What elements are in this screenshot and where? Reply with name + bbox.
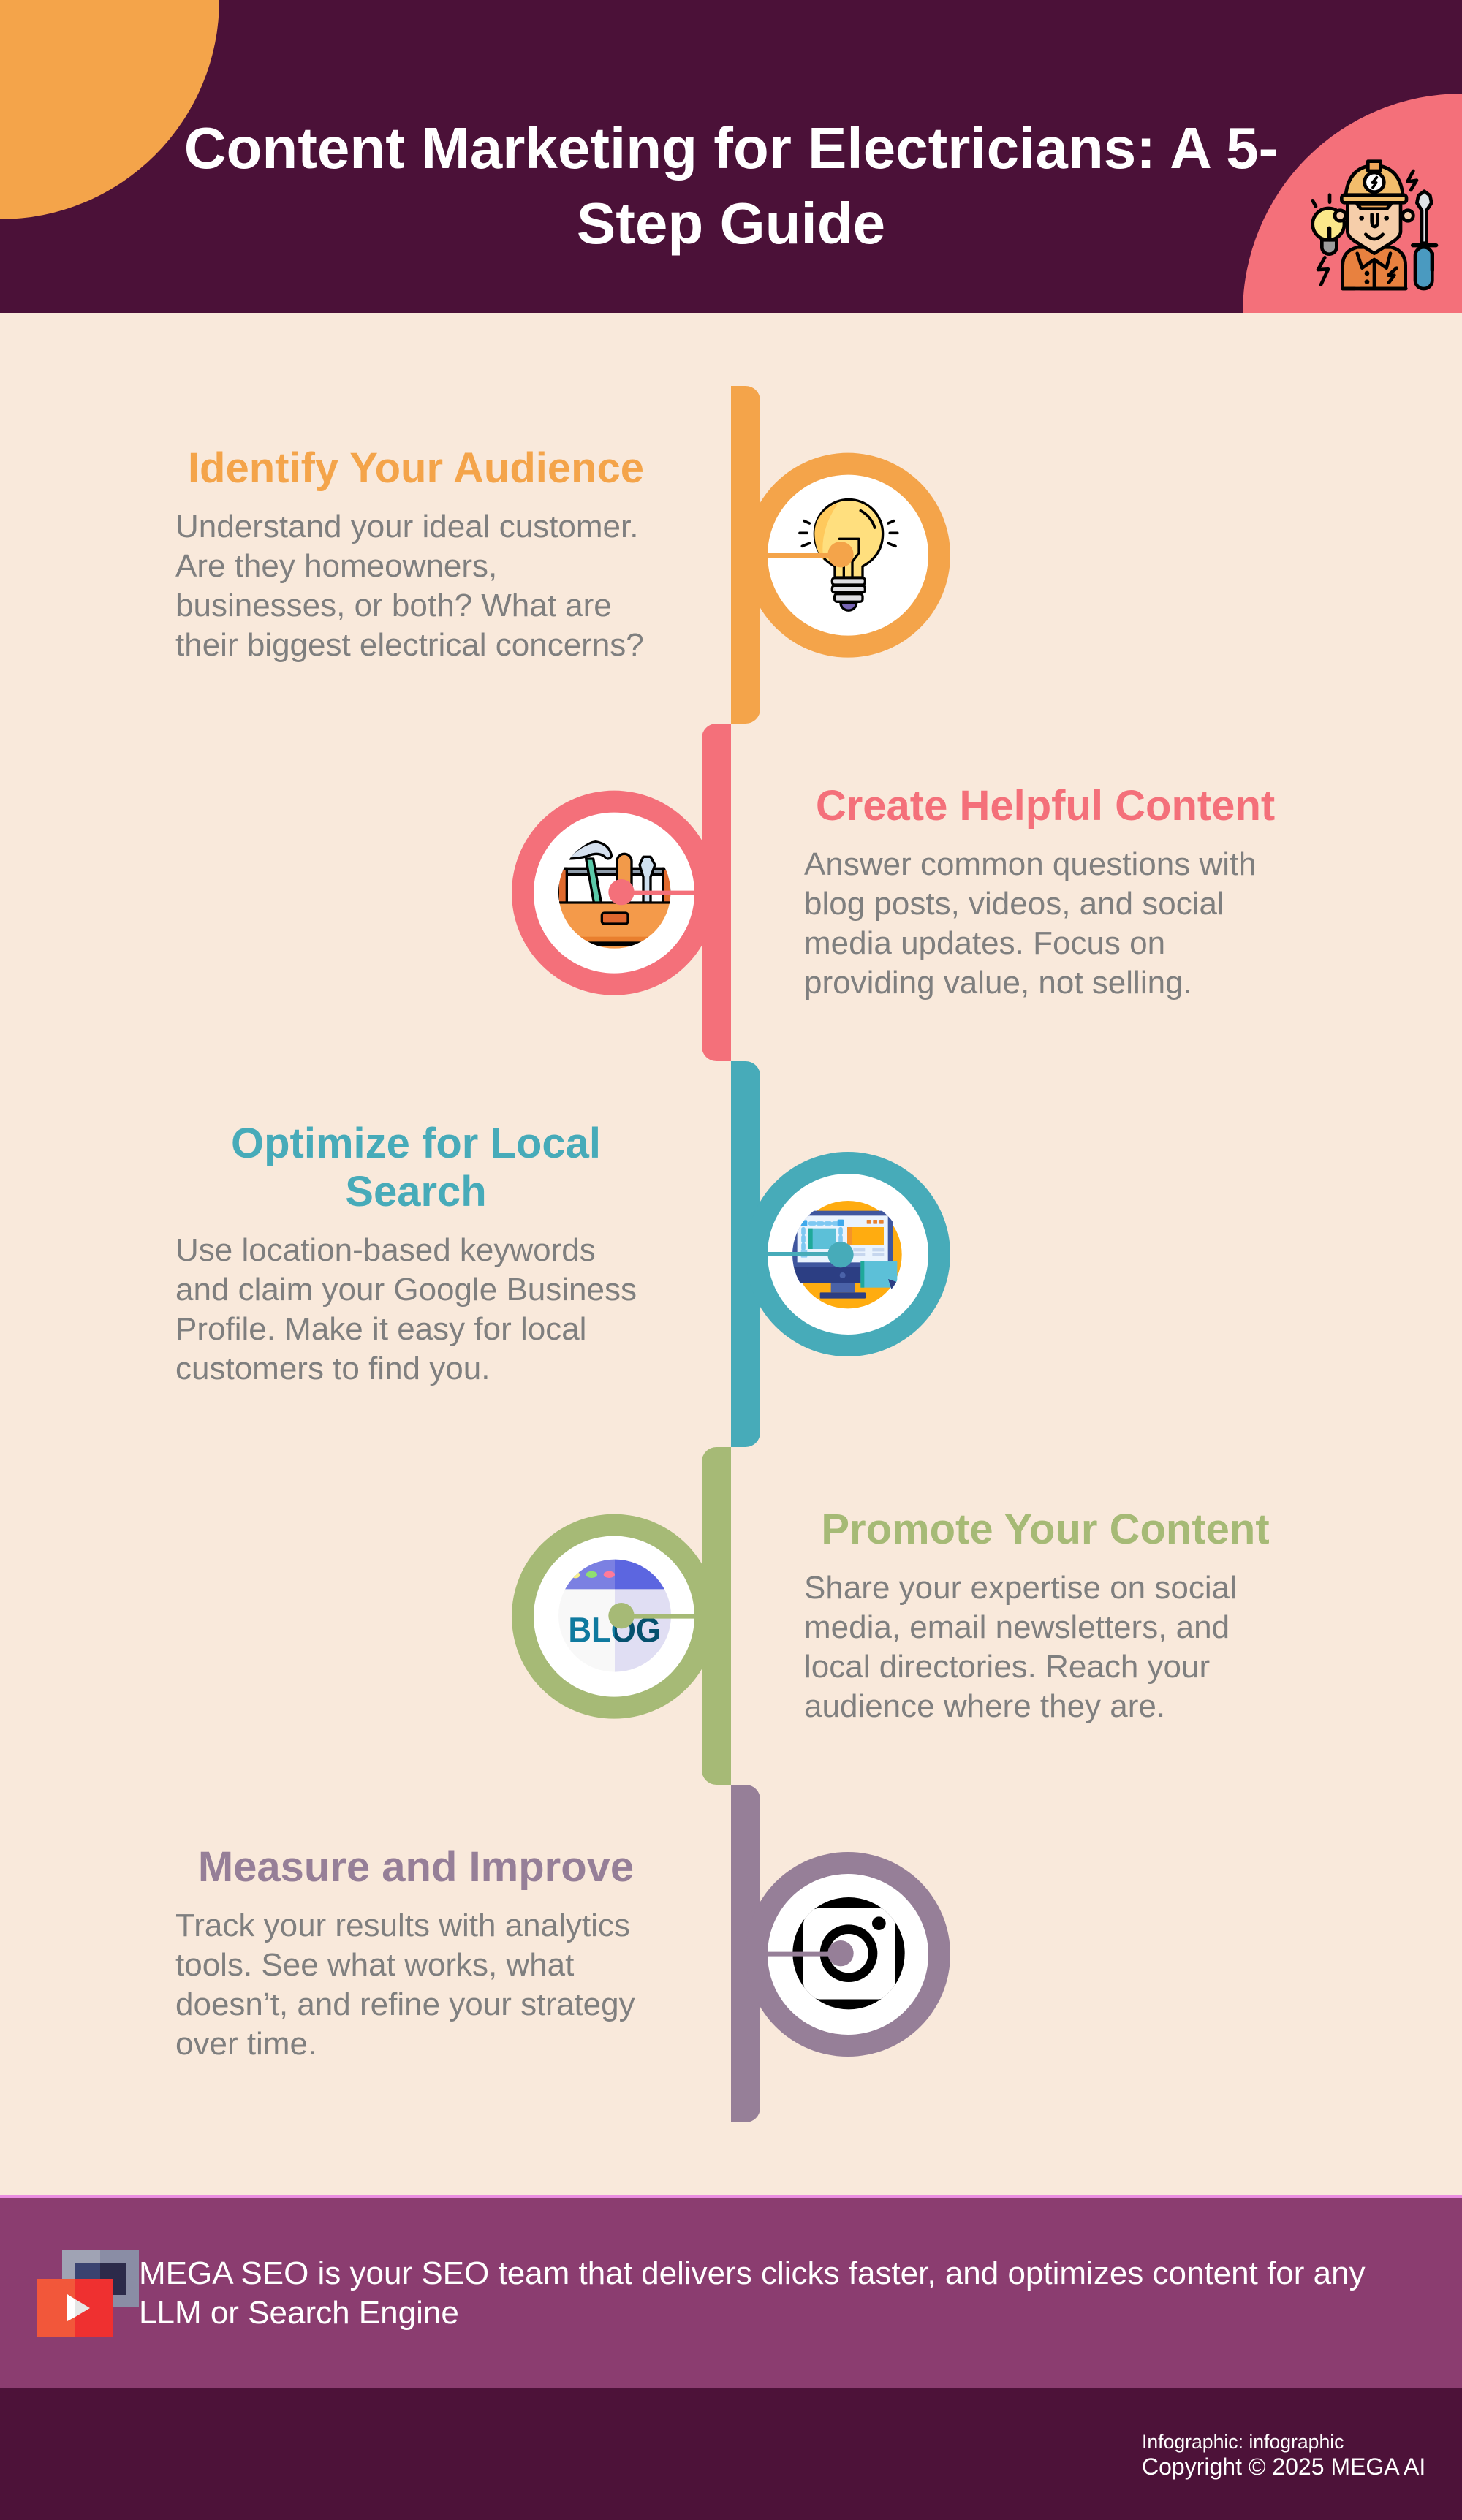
icon badge: toolbox xyxy=(512,791,702,995)
heading: promote your content: Promote Your Content xyxy=(821,1506,1270,1553)
heading: measure and improve: Measure and Improve xyxy=(198,1843,634,1891)
text: step 2 description: blog posts, videos, and social xyxy=(804,886,1224,922)
timeline bar segment 1 xyxy=(731,386,760,724)
text: step 5 description: Track your results with analytics xyxy=(175,1908,630,1943)
text: step 3 description: Use location-based keywords xyxy=(175,1232,596,1268)
title: Content Marketing for Electricians: A 5- xyxy=(184,115,1278,181)
text: step 3 description: and claim your Google Business xyxy=(175,1272,637,1308)
text: step 4 description: media, email newsletters, and xyxy=(804,1609,1230,1645)
text: step 5 description: over time. xyxy=(175,2026,317,2062)
title: Step Guide xyxy=(577,191,885,256)
footer credit band xyxy=(0,2388,1462,2520)
panel: step 5 measure and improve xyxy=(175,1785,950,2122)
text: step 2 description xyxy=(804,846,1257,1001)
header band xyxy=(0,0,1462,313)
text: step 3 description xyxy=(175,1232,637,1386)
text: promo message xyxy=(139,2255,1366,2331)
icon: video play logo xyxy=(37,2250,139,2337)
heading: create helpful content: Create Helpful Content xyxy=(816,782,1275,830)
text: infographic credit: Infographic: infographic xyxy=(1142,2431,1344,2453)
icon badge: instagram camera xyxy=(760,1852,950,2057)
icon badge: blog xyxy=(512,1514,702,1719)
text: step 2 description: Answer common questions with xyxy=(804,846,1257,882)
text: step 1 description xyxy=(175,509,644,663)
text: step 5 description: doesn’t, and refine your strategy xyxy=(175,1986,635,2022)
timeline bar segment 4 xyxy=(702,1447,731,1785)
heading: optimize for local search xyxy=(231,1120,601,1215)
title xyxy=(184,115,1278,256)
timeline bar segment 3 xyxy=(731,1061,760,1447)
text: step 5 description xyxy=(175,1908,635,2062)
text: step 3 description: customers to find you. xyxy=(175,1351,490,1386)
text: promo message: MEGA SEO is your SEO team that delivers clicks faster, and optimizes content for any xyxy=(139,2255,1366,2291)
icon: electrician xyxy=(1311,159,1439,291)
text: promo message: LLM or Search Engine xyxy=(139,2295,459,2331)
heading: optimize for local search: Optimize for Local xyxy=(231,1120,601,1167)
heading: identify your audience: Identify Your Audience xyxy=(188,444,644,492)
icon badge: blog: BLOG xyxy=(568,1611,661,1650)
text: step 1 description: their biggest electrical concerns? xyxy=(175,627,644,663)
text: copyright: Copyright © 2025 MEGA AI xyxy=(1142,2453,1425,2480)
text: step 4 description: local directories. Reach your xyxy=(804,1649,1210,1685)
text: step 3 description: Profile. Make it easy for local xyxy=(175,1311,586,1347)
panel: step 3 optimize for local search xyxy=(175,1061,950,1447)
text: step 2 description: providing value, not selling. xyxy=(804,965,1192,1001)
panel: step 4 promote your content xyxy=(512,1447,1270,1785)
footer promo band xyxy=(0,2195,1462,2388)
text: step 1 description: Are they homeowners, xyxy=(175,548,497,584)
decorative orange quarter circle xyxy=(0,0,219,219)
decorative pink quarter circle xyxy=(1243,94,1462,532)
timeline bar segment 5 xyxy=(731,1785,760,2122)
text: step 4 description xyxy=(804,1570,1237,1724)
text: step 4 description: Share your expertise on social xyxy=(804,1570,1237,1606)
text: step 4 description: audience where they are. xyxy=(804,1688,1165,1724)
text: step 1 description: Understand your ideal customer. xyxy=(175,509,638,544)
heading: optimize for local search: Search xyxy=(345,1168,487,1215)
icon badge: website on monitor xyxy=(760,1152,950,1356)
panel: step 2 create helpful content xyxy=(512,724,1275,1061)
timeline bar segment 2 xyxy=(702,724,731,1061)
panel: step 1 identify your audience xyxy=(175,386,950,724)
text: step 2 description: media updates. Focus on xyxy=(804,925,1165,961)
text: step 5 description: tools. See what works, what xyxy=(175,1947,574,1983)
text: step 1 description: businesses, or both? What are xyxy=(175,588,612,623)
icon badge: light bulb xyxy=(760,453,950,658)
